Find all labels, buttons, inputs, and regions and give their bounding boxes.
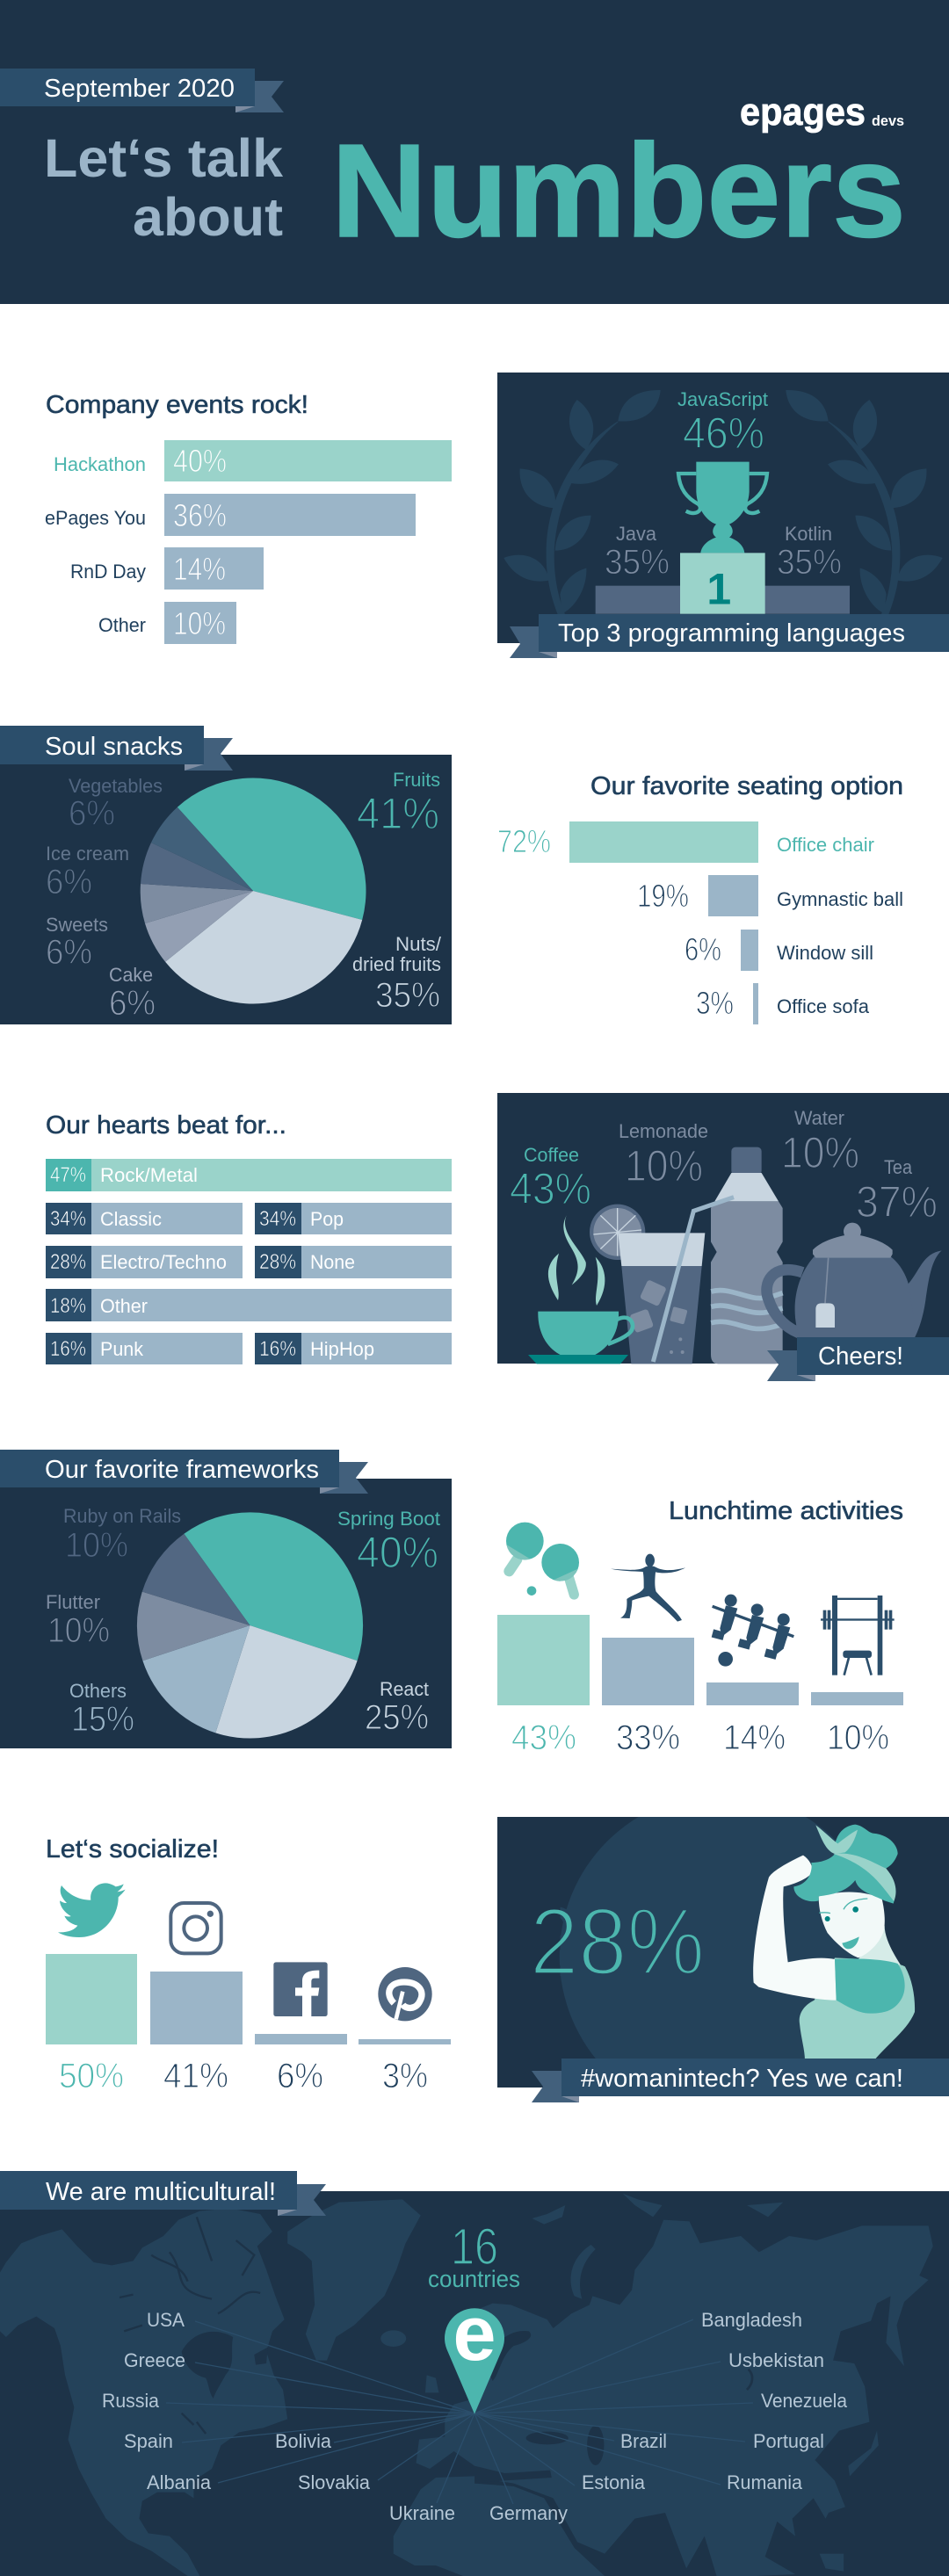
row: HipHop 16%: HipHop <box>310 1338 374 1360</box>
label: Cake 6%: 6% <box>109 984 156 1023</box>
heading: Numbers: Numbers <box>331 116 906 264</box>
country labels: Estonia <box>582 2471 646 2493</box>
row: None 28% <box>255 1246 452 1278</box>
ribbon: womanintech <box>532 2059 949 2102</box>
row: Punk 16%: 16% <box>50 1337 86 1361</box>
label: Flutter 10%: 10% <box>47 1611 110 1650</box>
country labels: Ukraine <box>389 2502 455 2524</box>
ribbon: We are multicultural <box>0 2171 326 2216</box>
label: Nuts dried fruits 35%: 35% <box>375 976 440 1015</box>
country labels: Spain <box>124 2430 173 2452</box>
bar: ePages You 36%: 36% <box>173 497 227 533</box>
bar: Other 10%: Other <box>98 614 146 636</box>
country labels: Slovakia <box>298 2471 371 2493</box>
bar: table tennis 43% <box>497 1615 590 1757</box>
bar: Gymnastic ball 19%: 19% <box>637 878 689 914</box>
bar: Gymnastic ball 19%: Gymnastic ball <box>777 888 903 910</box>
bar: Window sill 6%: 6% <box>685 931 721 967</box>
label: Vegetables 6%: 6% <box>69 794 115 833</box>
label: Kotlin 35% <box>777 523 842 582</box>
row: Rock/Metal 47% <box>46 1159 452 1191</box>
country labels: USA <box>147 2309 185 2331</box>
label: Ruby on Rails 10% <box>63 1505 181 1565</box>
heading: Let's talk about <box>44 128 283 247</box>
bar: gym 10% <box>811 1692 903 1757</box>
bar: Office chair 72% <box>497 821 874 863</box>
row: Electro/Techno 28% <box>46 1246 243 1278</box>
icon: pinterest <box>378 1967 432 2021</box>
country labels: Bangladesh <box>701 2309 802 2331</box>
row: Pop 34%: 34% <box>259 1207 296 1231</box>
panel: frameworks <box>0 1450 452 1748</box>
icon: instagram <box>170 1903 221 1953</box>
label: Cake 6%: Cake <box>109 964 153 986</box>
bar: ePages You 36%: ePages You <box>45 507 146 529</box>
bar: Window sill 6% <box>685 930 873 971</box>
label: Coffee 43%: Coffee <box>524 1144 579 1166</box>
label: Flutter 10% <box>46 1591 110 1650</box>
bar: Hackathon 40%: 40% <box>173 443 227 479</box>
row: Electro/Techno 28%: Electro/Techno <box>100 1251 227 1273</box>
bar: Window sill 6%: Window sill <box>777 942 873 964</box>
label: Others 15%: 15% <box>71 1700 134 1739</box>
label: Vegetables 6%: Vegetables <box>69 775 163 797</box>
label: Sweets 6% <box>46 914 108 972</box>
row: HipHop 16%: 16% <box>259 1337 296 1361</box>
logo: epages devs: devs <box>872 112 904 129</box>
country labels: Venezuela <box>761 2390 848 2412</box>
stat: 16 countries <box>428 2218 520 2292</box>
label: JavaScript 46%: 46% <box>683 409 764 458</box>
heading: Let's talk about: about <box>133 187 283 247</box>
label: Fruits 41%: 41% <box>357 789 439 838</box>
heading: Let's talk about: Let‘s talk <box>44 128 283 188</box>
label: Java 35%: 35% <box>605 543 670 582</box>
label: Spring Boot 40% <box>337 1508 440 1577</box>
illustration: coffee cup <box>528 1212 633 1364</box>
bar: facebook 6% <box>255 2034 347 2095</box>
bar: Office sofa 3%: 3% <box>696 985 734 1021</box>
label: Ice cream 6%: 6% <box>46 863 92 901</box>
bar: RnD Day 14% <box>70 547 264 590</box>
row: Other 18%: 18% <box>50 1294 86 1318</box>
label: Spring Boot 40%: Spring Boot <box>337 1508 440 1530</box>
heading: Our hearts beat for: Our hearts beat for... <box>46 1111 286 1140</box>
stat: 16 countries: 16 <box>451 2218 498 2276</box>
heading: Our favorite seating option: Our favorite seating option <box>590 772 903 800</box>
label: Others 15% <box>69 1680 134 1739</box>
bar: Hackathon 40% <box>54 440 452 481</box>
label: Tea 37%: Tea <box>884 1156 913 1178</box>
row: Punk 16% <box>46 1333 243 1364</box>
panel: music <box>46 1111 452 1364</box>
label: Kotlin 35%: Kotlin <box>785 523 832 545</box>
heading: Let's socialize: Let‘s socialize! <box>46 1835 219 1863</box>
label: Spring Boot 40%: 40% <box>357 1528 438 1577</box>
label: Lemonade 10%: Lemonade <box>619 1120 708 1142</box>
label: Sweets 6%: Sweets <box>46 914 108 936</box>
label: Coffee 43%: 43% <box>510 1164 591 1213</box>
world map <box>0 2194 933 2576</box>
label: Sweets 6%: 6% <box>46 933 92 972</box>
icon: table tennis <box>501 1523 583 1596</box>
bar: twitter 50%: 50% <box>59 2057 124 2095</box>
ribbon: September 2020: September 2020 <box>44 75 235 103</box>
panel: top 3 programming languages <box>497 373 949 658</box>
label: Others 15%: Others <box>69 1680 127 1702</box>
bar: yoga 33% <box>602 1638 694 1757</box>
label: Nuts dried fruits 35% <box>352 933 442 1015</box>
heading: Lunchtime activities: Lunchtime activities <box>669 1497 903 1525</box>
country labels: Germany <box>489 2502 568 2524</box>
ribbon: Top 3 programming languages <box>510 614 949 658</box>
stat: 28%: 28% <box>530 1888 705 1994</box>
label: React 25%: 25% <box>365 1698 429 1737</box>
country labels <box>102 2309 848 2524</box>
panel: company events <box>45 391 452 644</box>
ribbon: womanintech: #womanintech? Yes we can! <box>581 2065 903 2093</box>
label: Ice cream 6%: Ice cream <box>46 843 129 865</box>
label: Kotlin 35%: 35% <box>777 543 842 582</box>
bar: yoga 33%: 33% <box>616 1719 680 1757</box>
logo: epages devs: epages <box>740 90 866 134</box>
label: React 25% <box>365 1678 429 1737</box>
bar: Office sofa 3% <box>696 983 870 1024</box>
icon: facebook <box>273 1962 328 2016</box>
heading: Company events rock: Company events rock! <box>46 391 308 419</box>
icon: twitter bird <box>58 1883 126 1937</box>
icon: trophy on podium <box>596 462 850 614</box>
label: JavaScript 46% <box>677 388 768 458</box>
country labels: Usbekistan <box>728 2349 824 2371</box>
ribbon: Soul snacks: Soul snacks <box>45 733 183 761</box>
stat: 16 countries: countries <box>428 2266 520 2292</box>
row: Other 18% <box>46 1289 452 1321</box>
bar: instagram 41% <box>150 1972 243 2095</box>
label: Water 10%: 10% <box>781 1128 859 1177</box>
bar: pinterest 3%: 3% <box>382 2057 428 2095</box>
label: Ruby on Rails 10%: Ruby on Rails <box>63 1505 181 1527</box>
row: None 28%: 28% <box>259 1250 296 1274</box>
panel: socialize <box>46 1835 451 2095</box>
country labels: Bolivia <box>275 2430 332 2452</box>
row: Pop 34% <box>255 1203 452 1234</box>
row: Classic 34%: 34% <box>50 1207 86 1231</box>
bar: Other 10%: 10% <box>173 605 226 641</box>
label: Java 35%: Java <box>616 523 657 545</box>
country labels: Russia <box>102 2390 160 2412</box>
decorative circle backdrop <box>559 1817 870 2059</box>
icon: yoga <box>611 1554 685 1622</box>
label: Tea 37%: 37% <box>856 1177 938 1226</box>
icon: trophy on podium: 1 <box>706 565 731 614</box>
bar: Hackathon 40%: Hackathon <box>54 453 146 475</box>
country labels: Rumania <box>727 2471 803 2493</box>
bar: Office chair 72%: Office chair <box>777 834 874 856</box>
ribbon: Our favorite frameworks: Our favorite frameworks <box>45 1456 319 1484</box>
panel: seating option <box>497 772 903 1024</box>
row: Pop 34%: Pop <box>310 1208 344 1230</box>
ribbon: Top 3 programming languages: Top 3 programming languages <box>558 619 905 648</box>
label: Cake 6% <box>109 964 156 1023</box>
label: Nuts dried fruits 35%: dried fruits <box>352 953 441 975</box>
pie chart: snacks <box>141 778 366 1003</box>
illustration: woman flexing arm <box>753 1825 915 2060</box>
label: Ruby on Rails 10%: 10% <box>65 1526 128 1565</box>
ribbon: Cheers <box>767 1337 949 1381</box>
panel: women in tech <box>497 1817 949 2102</box>
row: Rock/Metal 47%: 47% <box>50 1163 86 1187</box>
country labels: Portugal <box>753 2430 824 2452</box>
ribbon: We are multicultural: We are multicultural! <box>46 2178 276 2206</box>
bar: ePages You 36% <box>45 494 416 536</box>
country labels: Albania <box>147 2471 212 2493</box>
ribbon: Cheers: Cheers! <box>818 1342 903 1371</box>
bar: Office chair 72%: 72% <box>497 823 551 859</box>
panel: multicultural map <box>0 2171 949 2576</box>
bar: Other 10% <box>98 602 236 644</box>
label: Fruits 41%: Fruits <box>393 769 440 791</box>
icon: laurel wreath <box>503 390 943 615</box>
bar: Office sofa 3%: Office sofa <box>777 995 870 1017</box>
label: Java 35% <box>605 523 670 582</box>
bar: gym 10%: 10% <box>827 1719 889 1757</box>
label: JavaScript 46%: JavaScript <box>677 388 768 410</box>
label: Water 10% <box>781 1107 859 1177</box>
label: Nuts dried fruits 35%: Nuts/ <box>395 933 442 955</box>
icon: location pin with e <box>445 2290 504 2414</box>
label: Flutter 10%: Flutter <box>46 1591 100 1613</box>
header panel <box>0 0 949 304</box>
icon: location pin with e: e <box>453 2290 496 2377</box>
icon: table football <box>712 1595 793 1667</box>
ribbon: Soul snacks <box>0 726 233 771</box>
row: Electro/Techno 28%: 28% <box>50 1250 86 1274</box>
row: Classic 34% <box>46 1203 243 1234</box>
label: Water 10%: Water <box>794 1107 844 1129</box>
label: Lemonade 10%: 10% <box>625 1141 703 1190</box>
bar: table football 14%: 14% <box>723 1719 786 1757</box>
row: None 28%: None <box>310 1251 355 1273</box>
bar: RnD Day 14%: 14% <box>173 551 226 587</box>
bar: RnD Day 14%: RnD Day <box>70 561 146 582</box>
row: Other 18%: Other <box>100 1295 148 1317</box>
bar: table football 14% <box>706 1682 799 1757</box>
illustration: teapot <box>767 1223 942 1344</box>
label: React 25%: React <box>380 1678 429 1700</box>
pie chart: frameworks <box>137 1512 363 1739</box>
connector lines to countries <box>166 2319 753 2504</box>
label: Vegetables 6% <box>69 775 163 833</box>
icon: gym rack <box>821 1596 895 1675</box>
label: Tea 37% <box>856 1156 938 1226</box>
label: Lemonade 10% <box>619 1120 708 1190</box>
bar: instagram 41%: 41% <box>163 2057 228 2095</box>
country labels: Brazil <box>620 2430 667 2452</box>
country labels: Greece <box>124 2349 185 2371</box>
panel: soul snacks <box>0 726 452 1024</box>
row: HipHop 16% <box>255 1333 452 1364</box>
bar: pinterest 3% <box>359 2039 451 2095</box>
panel: lunchtime activities <box>497 1497 903 1757</box>
bar: twitter 50% <box>46 1954 137 2095</box>
row: Rock/Metal 47%: Rock/Metal <box>100 1164 198 1186</box>
bar: Gymnastic ball 19% <box>637 875 903 916</box>
panel: drinks <box>497 1093 949 1381</box>
ribbon: Our favorite frameworks <box>0 1450 368 1494</box>
row: Classic 34%: Classic <box>100 1208 162 1230</box>
label: Ice cream 6% <box>46 843 129 901</box>
bar: table tennis 43%: 43% <box>511 1719 576 1757</box>
ribbon: September 2020 <box>0 69 284 112</box>
illustration: lemonade and bottle <box>590 1147 783 1364</box>
bar: facebook 6%: 6% <box>277 2057 323 2095</box>
row: Punk 16%: Punk <box>100 1338 144 1360</box>
label: Coffee 43% <box>510 1144 591 1213</box>
label: Fruits 41% <box>357 769 440 838</box>
